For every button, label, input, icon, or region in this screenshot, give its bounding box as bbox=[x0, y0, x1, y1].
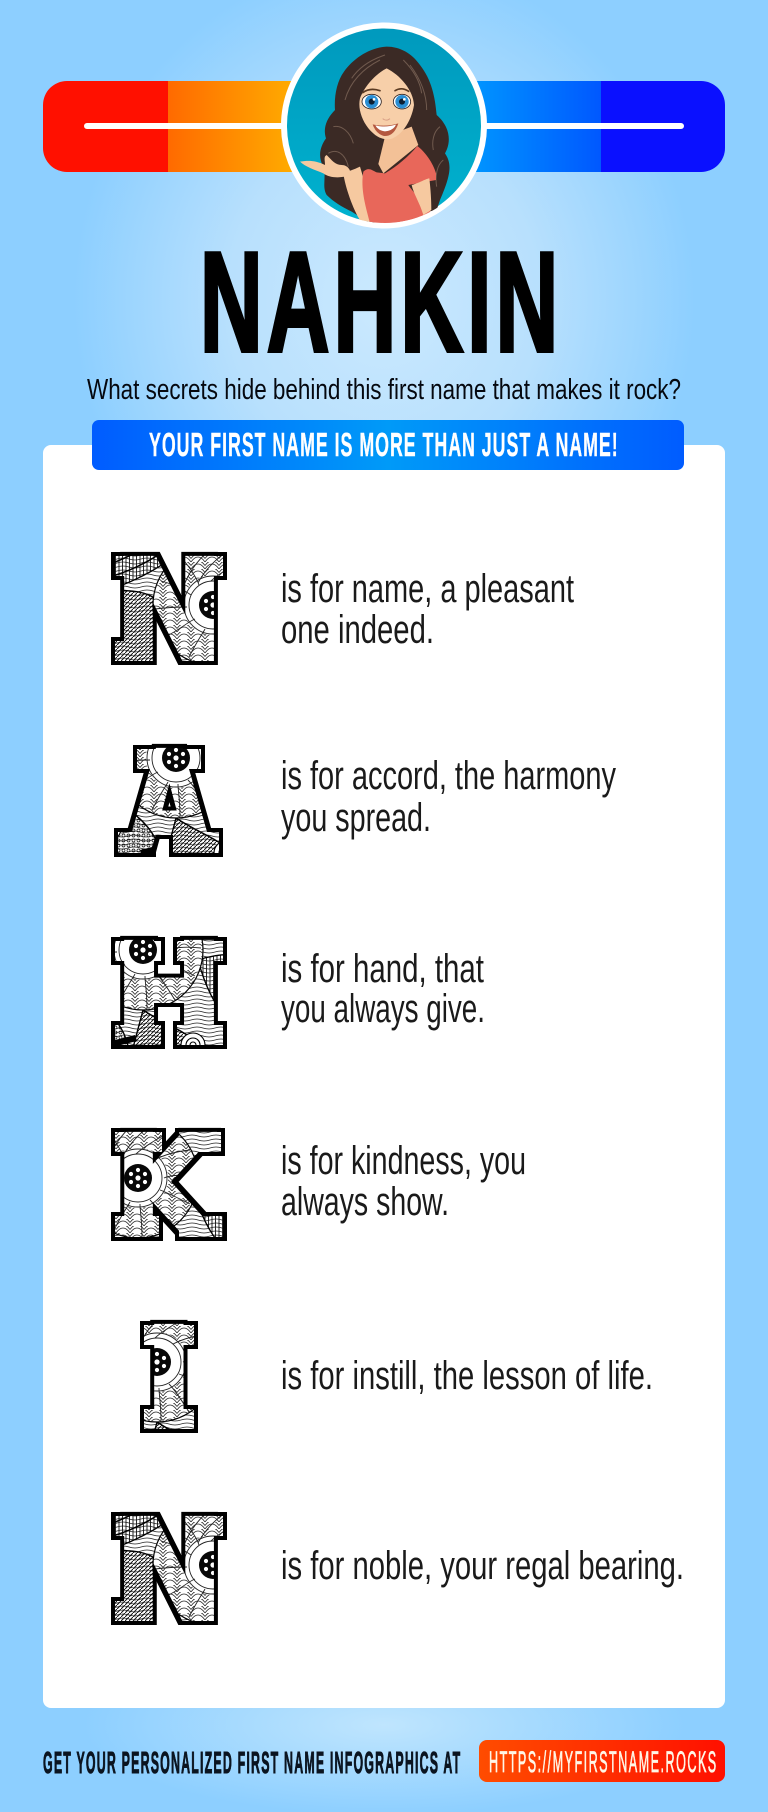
row 4 text: always show. bbox=[281, 1180, 449, 1224]
icon: mandala letter H: H bbox=[115, 917, 223, 1075]
white content panel bbox=[43, 445, 725, 1708]
row 4: letter K bbox=[115, 1109, 526, 1267]
row 3 text: is for hand, that bbox=[281, 947, 484, 991]
banner bbox=[92, 420, 684, 470]
row 1 text: is for name, a pleasant bbox=[281, 567, 574, 611]
row 2 text bbox=[281, 754, 616, 840]
header colour bar bbox=[43, 81, 725, 172]
icon: mandala letter N: N bbox=[115, 1493, 223, 1651]
row 1 text bbox=[281, 567, 574, 652]
title: NAHKIN bbox=[200, 223, 562, 381]
icon: mandala letter I: I bbox=[145, 1301, 192, 1459]
row 3: letter H bbox=[115, 917, 485, 1075]
icon: mandala letter K: K bbox=[116, 1109, 215, 1267]
row 4 text: is for kindness, you bbox=[281, 1139, 526, 1183]
row 1: letter N bbox=[115, 533, 574, 691]
footer link button bbox=[479, 1740, 725, 1782]
avatar: woman in circular frame bbox=[284, 26, 484, 226]
icon: mandala letter A: A bbox=[129, 725, 210, 883]
row 6: letter N bbox=[115, 1493, 684, 1651]
row 1 text: one indeed. bbox=[281, 608, 434, 652]
icon: mandala letter N: N bbox=[115, 533, 223, 691]
row 5: letter I bbox=[144, 1301, 653, 1459]
row 2 text: is for accord, the harmony bbox=[281, 754, 616, 798]
footer link text: HTTPS://MYFIRSTNAME.ROCKS bbox=[489, 1745, 716, 1779]
footer call to action: GET YOUR PERSONALIZED FIRST NAME INFOGRAPHICS AT bbox=[43, 1747, 461, 1781]
row 2 text: you spread. bbox=[281, 796, 431, 840]
banner text: YOUR FIRST NAME IS MORE THAN JUST A NAME! bbox=[149, 426, 618, 463]
row 3 text bbox=[281, 947, 485, 1031]
row 2: letter A bbox=[118, 725, 616, 883]
row 3 text: you always give. bbox=[281, 987, 485, 1031]
row 4 text bbox=[281, 1139, 526, 1224]
